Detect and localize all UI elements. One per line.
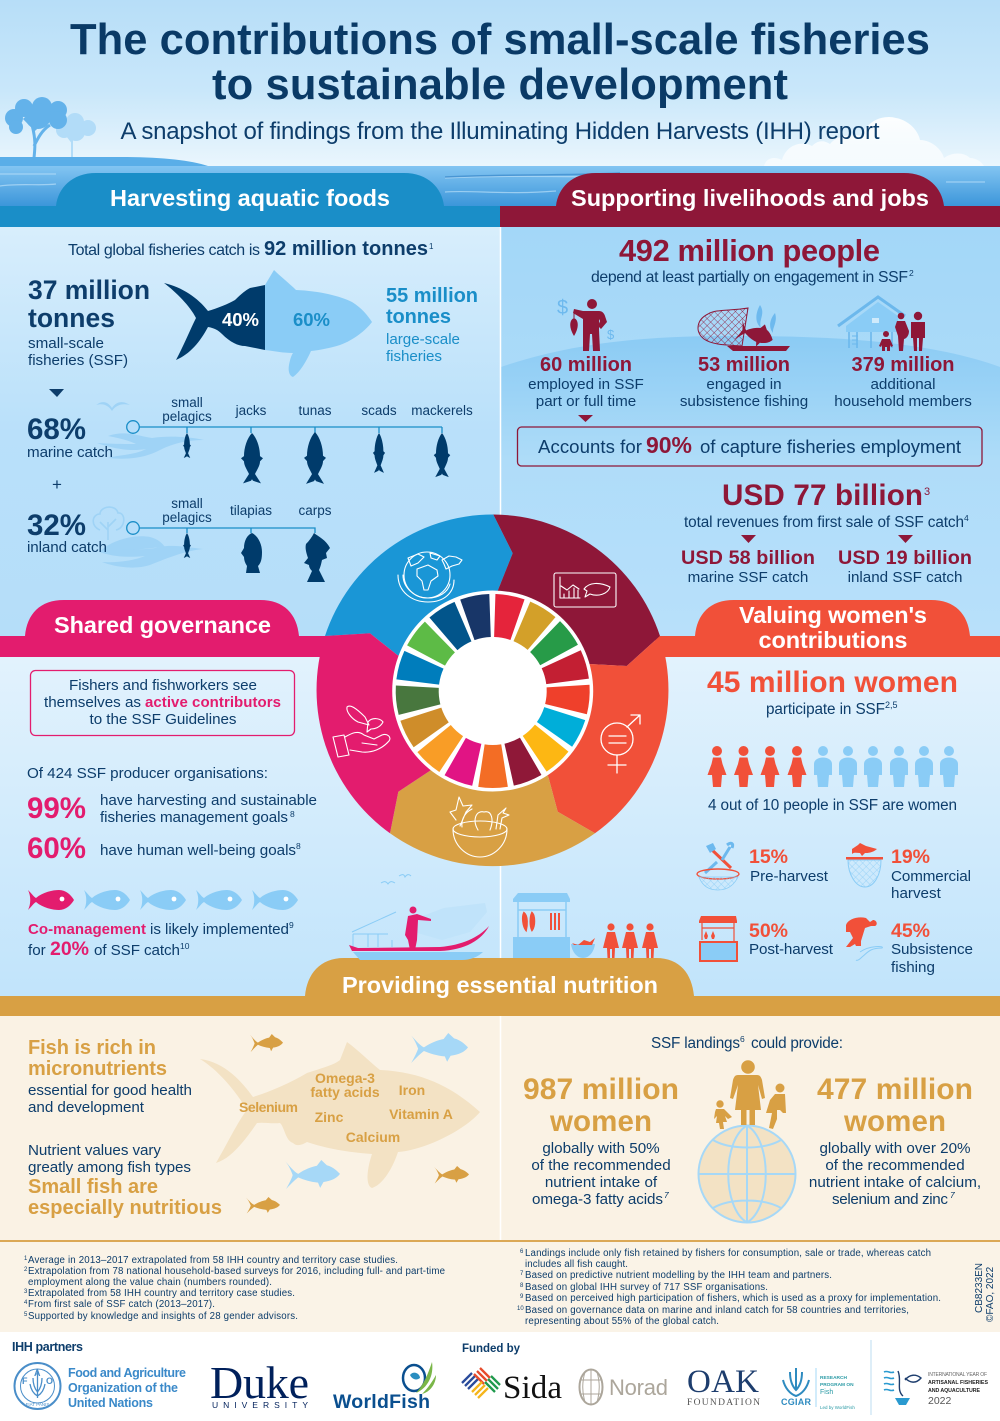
footnotes right: Based on predictive nutrient modelling by the IHH team and partners. — [525, 1270, 832, 1281]
text: fish is rich in micronutrients: essential for good health — [28, 1082, 192, 1099]
callout: 90 percent: of capture fisheries employment — [700, 436, 962, 457]
icon: commercial net with fish — [846, 843, 883, 887]
stat: 60 million employed: part or full time — [536, 393, 636, 410]
icon: small pelagic inland — [183, 533, 191, 558]
panel: nutrition background — [0, 1016, 1000, 1240]
stat: 60 million employed: employed in SSF — [528, 376, 644, 393]
text: 55 million tonnes large-scale: large-scale — [386, 331, 460, 348]
icon: jacks fish — [241, 433, 263, 483]
logo: Sida: Sida — [503, 1370, 562, 1406]
icon: fishing boat — [349, 875, 489, 960]
stat: 19 percent commercial: harvest — [891, 885, 942, 902]
heading: valuing women's contributions — [655, 600, 1000, 657]
footnotes right: Based on governance data on marine and inland catch for 58 countries and territories, — [525, 1305, 909, 1316]
icon: tilapia — [241, 533, 262, 573]
stat: 15 percent pre-harvest: Pre-harvest — [750, 868, 829, 885]
footnotes right: Landings include only fish retained by fishers for consumption, sale or trade, whereas catch — [525, 1248, 931, 1259]
label: scads: scads — [361, 403, 397, 418]
callout: active contributors: active contributors — [145, 694, 281, 711]
stat: 60 percent: 60% — [27, 832, 86, 865]
logo: WorldFish: WorldFish — [333, 1391, 430, 1413]
panel: women background — [501, 657, 1000, 996]
icon: employed person with fish: $ — [607, 327, 615, 342]
logo: Duke University: UNIVERSITY — [212, 1400, 308, 1410]
stat: 987 million women: women — [549, 1105, 652, 1138]
stat: 45 million women: participate in SSF — [766, 701, 885, 718]
stat: 99 percent: fisheries management goals — [100, 809, 288, 826]
stat: 45 percent subsistence: 45% — [891, 920, 930, 942]
stat: 50 percent post-harvest — [749, 920, 834, 958]
stat: 60 million employed: 60 million — [540, 354, 632, 376]
heading: IHH partners: IHH partners — [12, 1340, 83, 1354]
logo: International Year of Artisanal Fisheries and Aquaculture 2022 — [884, 1371, 988, 1407]
stat: 477 million women: globally with over 20% — [819, 1140, 971, 1157]
stat: USD 19 billion: USD 19 billion — [838, 547, 972, 569]
panel: shared governance background — [0, 657, 500, 996]
text: nutrient values vary: Nutrient values vary — [28, 1142, 161, 1159]
icon: small fish swimming — [246, 1033, 469, 1214]
stat: 19 percent commercial: 19% — [891, 846, 930, 868]
stat: 45 percent subsistence: Subsistence — [891, 941, 973, 958]
panel: supporting livelihoods background — [501, 227, 1000, 636]
stat: 379 million household: 379 million — [852, 354, 954, 376]
text: fish is rich in micronutrients: micronutrients — [28, 1058, 167, 1080]
stat: 987 million women: 7 — [664, 1190, 669, 1200]
text: USD 77 billion: 4 — [964, 513, 969, 523]
text: plus: + — [52, 475, 62, 494]
stat: 45 million women: 45 million women — [707, 666, 958, 699]
footnotes right: 7 — [520, 1271, 524, 1277]
label: selenium: Selenium — [239, 1099, 298, 1115]
title: to sustainable development — [212, 61, 788, 109]
subtitle: A snapshot of findings from the Illuminating Hidden Harvests (IHH) report — [120, 118, 880, 145]
text: 37 million tonnes small-scale: fisheries (SSF) — [28, 352, 128, 369]
callout: active contributors: Fishers and fishworkers see — [69, 677, 257, 694]
stat: 987 million women: 987 million — [523, 1073, 679, 1106]
arrow: down from SSF — [49, 389, 64, 397]
chart: fish 40 percent 60 percent: 60% — [293, 309, 330, 330]
heading: funded by: Funded by — [462, 1343, 521, 1355]
footnotes left: 2 — [24, 1267, 28, 1273]
icon: globe with fish — [398, 552, 462, 602]
icon: subsistence fishing figure — [846, 917, 882, 960]
chart: fish 40 percent 60 percent — [164, 270, 372, 377]
footnotes left: Supported by knowledge and insights of 28 gender advisors. — [28, 1311, 298, 1322]
logo: OAK Foundation: FOUNDATION — [687, 1398, 760, 1408]
text: co-management: 20% — [50, 938, 89, 960]
label: carps: carps — [298, 503, 332, 518]
wheel segment: livelihoods maroon — [493, 514, 660, 691]
text: co-management: of SSF catch — [94, 942, 180, 959]
text: USD 77 billion: USD 77 billion — [722, 479, 923, 512]
callout: 90 percent: 90% — [646, 432, 692, 458]
panel: footnotes background — [0, 1240, 1000, 1332]
stat: 60 percent — [27, 832, 301, 865]
callout: 90 percent: Accounts for — [538, 436, 642, 457]
text: publication code — [974, 1263, 996, 1322]
stat: 15 percent pre-harvest: 15% — [749, 846, 788, 868]
logo: CGIAR research program on fish: RESEARCH — [820, 1375, 847, 1381]
callout: active contributors — [30, 670, 294, 736]
stat: 477 million women — [809, 1073, 981, 1208]
text: co-management: Co-management — [28, 921, 146, 938]
logo: Norad: Norad — [609, 1375, 668, 1400]
text: 492 million people: depend at least partially on engagement in SSF — [591, 269, 908, 286]
text: co-management: is likely implemented — [150, 921, 289, 938]
stat: 379 million household — [834, 354, 972, 410]
stat: 45 percent subsistence: fishing — [891, 959, 935, 976]
logo: CGIAR research program on fish: PROGRAM ON — [820, 1382, 854, 1388]
label: calcium: Calcium — [346, 1129, 400, 1145]
stat: 379 million household: additional — [870, 376, 936, 393]
logo: FAO: O — [46, 1376, 53, 1386]
label: small pelagics: pelagics — [162, 409, 212, 424]
label: small pelagics: small — [171, 395, 203, 410]
footnotes right: 6 — [520, 1249, 524, 1255]
logo: Duke University: Duke — [210, 1357, 309, 1408]
logo: International Year of Artisanal Fisheries and Aquaculture 2022: ARTISANAL FISHERIES — [928, 1380, 988, 1386]
label: jacks: jacks — [235, 403, 267, 418]
stat: 53 million subsistence: 53 million — [698, 354, 790, 376]
footnotes right — [517, 1248, 941, 1327]
text: nutrient values vary: Small fish are — [28, 1176, 158, 1198]
icon: employed person with fish: $ — [557, 297, 568, 319]
text: fish is rich in micronutrients: Fish is rich in — [28, 1037, 156, 1059]
stat: 987 million women: omega-3 fatty acids — [532, 1191, 663, 1208]
stat: 53 million subsistence — [680, 354, 808, 410]
footnotes left: From first sale of SSF catch (2013–2017). — [28, 1299, 215, 1310]
text: 55 million tonnes large-scale — [386, 285, 478, 365]
title: The contributions of small-scale fisheries — [70, 16, 930, 64]
stat: 99 percent — [27, 792, 317, 826]
icon: inland tree and waves — [93, 507, 203, 568]
stat: 987 million women: globally with 50% — [542, 1140, 660, 1157]
heading: supporting livelihoods and jobs — [500, 173, 1000, 227]
sea — [0, 157, 1000, 206]
logo: OAK Foundation: OAK — [687, 1364, 759, 1400]
wheel segment: governance pink — [317, 633, 493, 833]
text: total global catch — [68, 238, 434, 260]
text: 37 million tonnes small-scale — [28, 275, 150, 369]
logo: FAO: FIAT PANIS — [26, 1402, 49, 1407]
stat: USD 19 billion: inland SSF catch — [848, 569, 962, 586]
stat: 987 million women: of the recommended — [531, 1157, 671, 1174]
label: zinc: Zinc — [315, 1109, 344, 1125]
label: omega-3 fatty acids: Omega-3 — [315, 1070, 375, 1086]
footnotes right: Based on global IHH survey of 717 SSF organisations. — [525, 1282, 768, 1293]
text: 37 million tonnes small-scale: small-scale — [28, 335, 104, 352]
stat: 477 million women: 477 million — [817, 1073, 973, 1106]
logo: CGIAR research program on fish: CGIAR — [781, 1397, 812, 1407]
stat: 987 million women: nutrient intake of — [545, 1174, 658, 1191]
label: tunas: tunas — [298, 403, 332, 418]
footnotes left: Extrapolation from 78 national household-based surveys for 2016, including full- and part-time — [28, 1266, 445, 1277]
logo: CGIAR research program on fish: Fish — [820, 1389, 833, 1396]
footnotes right: 10 — [517, 1306, 524, 1312]
stat: USD 19 billion — [838, 547, 972, 586]
text: co-management — [28, 920, 294, 960]
panel: logos background — [0, 1332, 1000, 1421]
logo: International Year of Artisanal Fisheries and Aquaculture 2022: 2022 — [928, 1395, 952, 1407]
stat: 53 million subsistence: subsistence fishing — [680, 393, 808, 410]
icon: bowl of fish — [450, 797, 509, 857]
icon: market stall — [513, 893, 595, 958]
text: total global catch: Total global fisheries catch is — [68, 242, 260, 259]
text: 68 percent marine catch: marine catch — [27, 444, 113, 461]
stat: 477 million women: nutrient intake of calcium, — [809, 1174, 981, 1191]
sky background — [0, 0, 1000, 166]
logo: WorldFish — [333, 1362, 436, 1413]
footnotes left: 4 — [24, 1300, 28, 1306]
icon: house on stilts with family — [838, 297, 925, 351]
heading: valuing women's contributions: Valuing women's — [739, 602, 927, 628]
footnotes left — [24, 1255, 445, 1322]
text: fish is rich in micronutrients — [28, 1037, 192, 1116]
stat: 50 percent post-harvest: 50% — [749, 920, 788, 942]
stat: 477 million women: selenium and zinc — [832, 1191, 948, 1208]
footnotes right: representing about 55% of the global catch. — [525, 1316, 719, 1327]
logo: CGIAR research program on fish — [781, 1368, 855, 1410]
label: omega-3 fatty acids — [310, 1070, 380, 1100]
label: iron: Iron — [399, 1082, 425, 1098]
icon: mackerel fish — [434, 433, 450, 477]
text: total global catch: 92 million tonnes — [264, 238, 428, 260]
text: nutrient values vary: especially nutritious — [28, 1197, 222, 1219]
arrow: to 90 percent box — [578, 415, 593, 422]
icon: clouds — [764, 117, 984, 166]
text: SSF landings could provide: SSF landings — [651, 1035, 740, 1052]
label: small pelagics — [162, 395, 212, 424]
icon: gender equality — [601, 715, 640, 773]
heading: valuing women's contributions: contributions — [758, 627, 908, 653]
icon: scad fish — [373, 433, 385, 473]
stat: USD 58 billion: marine SSF catch — [688, 569, 808, 586]
heading: harvesting aquatic foods: Harvesting aquatic foods — [110, 185, 390, 211]
arrows: to marine and inland — [741, 535, 913, 543]
icon row: five fish — [28, 890, 298, 910]
heading: shared governance: Shared governance — [54, 612, 271, 638]
text: USD 77 billion — [684, 479, 969, 531]
text: SSF landings could provide: 6 — [740, 1034, 745, 1044]
stat: 987 million women — [523, 1073, 679, 1208]
footnotes left: 5 — [24, 1312, 28, 1318]
chart: marine species line — [127, 395, 473, 484]
stat: 477 million women: 7 — [950, 1190, 955, 1200]
label: small pelagics inland: small — [171, 496, 203, 511]
label: vitamin A: Vitamin A — [389, 1106, 453, 1122]
wheel segment: women orange — [493, 636, 668, 833]
footnotes left: employment along the value chain (numbers rounded). — [28, 1277, 272, 1288]
text: 492 million people — [591, 233, 914, 286]
stat: 45 million women — [707, 666, 958, 718]
logo: FAO: Organization of the — [68, 1381, 178, 1395]
text: SSF landings could provide — [651, 1034, 843, 1052]
text: 37 million tonnes small-scale: tonnes — [28, 303, 115, 333]
stat: USD 58 billion — [681, 547, 815, 586]
text: total global catch: 1 — [429, 242, 434, 251]
footnotes right: 9 — [520, 1294, 524, 1300]
label: small pelagics inland: pelagics — [162, 510, 212, 525]
heading: providing essential nutrition: Providing essential nutrition — [342, 972, 658, 998]
stat: 60 million employed — [528, 354, 644, 410]
stat: 53 million subsistence: engaged in — [706, 376, 782, 393]
text: co-management: for — [28, 942, 46, 959]
text: co-management: 9 — [289, 920, 294, 930]
icon: pre-harvest tools and basket — [697, 843, 739, 890]
logo: Sida — [462, 1368, 562, 1406]
heading: harvesting aquatic foods — [0, 173, 500, 227]
title — [70, 16, 930, 109]
text: 492 million people: 2 — [909, 268, 914, 278]
SDG wheel — [386, 584, 599, 798]
text: 4 out of 10: 4 out of 10 people in SSF are women — [708, 797, 957, 814]
text: nutrient values vary: greatly among fish types — [28, 1159, 191, 1176]
chart: inland species line — [127, 496, 332, 582]
label: mackerels: mackerels — [411, 403, 473, 418]
panel: harvesting aquatic foods background — [0, 227, 500, 636]
logo: CGIAR research program on fish: Led by WorldFish — [820, 1405, 855, 1410]
chart: centre wheel — [317, 514, 668, 866]
text: 55 million tonnes large-scale: fisheries — [386, 348, 442, 365]
text: SSF landings could provide: could provide: — [751, 1035, 843, 1052]
logo: International Year of Artisanal Fisheries and Aquaculture 2022: AND AQUACULTURE — [928, 1388, 980, 1394]
label: small pelagics inland — [162, 496, 212, 525]
logo: International Year of Artisanal Fisheries and Aquaculture 2022: INTERNATIONAL YEAR OF — [928, 1372, 987, 1378]
text: fish is rich in micronutrients: and development — [28, 1099, 145, 1116]
callout: 90 percent — [518, 427, 982, 466]
logo: FAO: A — [34, 1368, 41, 1378]
text: co-management: 10 — [180, 941, 190, 951]
icon: trees — [5, 97, 96, 158]
footnotes right: includes all fish caught. — [525, 1259, 628, 1270]
stat: 50 percent post-harvest: Post-harvest — [749, 941, 834, 958]
chart: nutrient fish — [200, 1042, 480, 1188]
stat: 99 percent: 99% — [27, 792, 86, 825]
text: 32 percent inland catch: 32% — [27, 509, 86, 542]
chart: fish 40 percent 60 percent: 40% — [222, 309, 259, 330]
text: 68 percent marine catch: 68% — [27, 413, 86, 446]
icon: post-harvest stall — [699, 916, 737, 961]
centre divider — [500, 227, 502, 1240]
stat: 45 percent subsistence — [891, 920, 973, 976]
icon: tuna fish — [304, 432, 326, 484]
label: omega-3 fatty acids: fatty acids — [310, 1084, 380, 1100]
stat: 477 million women: of the recommended — [825, 1157, 965, 1174]
icon: hand with fish — [333, 706, 390, 757]
stat: 19 percent commercial — [891, 846, 971, 902]
stat: USD 58 billion: USD 58 billion — [681, 547, 815, 569]
logo: FAO: F — [22, 1376, 28, 1386]
text: of 424 SSF producer organisations: Of 424 SSF producer organisations: — [27, 765, 268, 782]
icon: three women at market — [603, 923, 658, 958]
logo: FAO: United Nations — [68, 1396, 153, 1410]
text: nutrient values vary — [28, 1142, 222, 1219]
footnotes left: Average in 2013–2017 extrapolated from 58 IHH country and territory case studies. — [28, 1255, 398, 1266]
wheel segment: harvesting blue — [325, 514, 513, 691]
text: 37 million tonnes small-scale: 37 million — [28, 275, 150, 305]
footnotes left: 3 — [24, 1289, 28, 1295]
stat: 477 million women: women — [843, 1105, 946, 1138]
label: tilapias: tilapias — [230, 503, 272, 518]
stat: 60 percent: 8 — [296, 841, 301, 851]
chart: 4 of 10 people pictogram — [708, 746, 958, 787]
stat: 45 million women: 2,5 — [885, 700, 898, 710]
stat: 99 percent: have harvesting and sustainable — [100, 792, 317, 809]
icon: carp — [304, 533, 330, 582]
heading: shared governance — [0, 600, 335, 657]
divider: logos — [870, 1340, 872, 1415]
icon: net with fish on plate — [698, 305, 790, 352]
text: USD 77 billion: total revenues from first sale of SSF catch — [684, 514, 964, 531]
callout: active contributors: to the SSF Guidelines — [90, 711, 237, 728]
panel: hill behind livelihoods — [501, 336, 1000, 460]
logo: FAO: Food and Agriculture — [68, 1366, 186, 1380]
text: 55 million tonnes large-scale: tonnes — [386, 306, 451, 328]
logo: Norad — [580, 1370, 668, 1404]
footnotes left: Extrapolated from 58 IHH country and territory case studies. — [28, 1288, 295, 1299]
stat: 19 percent commercial: Commercial — [891, 868, 971, 885]
heading: providing essential nutrition — [0, 958, 1000, 1016]
text: 32 percent inland catch: inland catch — [27, 539, 107, 556]
heading: supporting livelihoods and jobs: Supporting livelihoods and jobs — [571, 185, 929, 211]
text: 492 million people: 492 million people — [619, 233, 880, 268]
stat: 99 percent: 8 — [290, 809, 295, 819]
text: 55 million tonnes large-scale: 55 million — [386, 285, 478, 307]
stat: 60 percent: have human well-being goals — [100, 842, 296, 859]
icon: mother and children on globe — [698, 1060, 796, 1222]
icon: employed person with fish — [557, 297, 615, 351]
icon: small pelagic fish — [183, 433, 191, 458]
stat: 379 million household: household members — [834, 393, 972, 410]
logo: FAO — [14, 1363, 186, 1410]
text: publication code: CB8233EN — [974, 1263, 985, 1313]
text: publication code: ©FAO, 2022 — [985, 1266, 996, 1322]
icon: marine waves and bird — [96, 402, 204, 459]
text: 68 percent marine catch — [27, 413, 113, 461]
footnotes right: Based on perceived high participation of fishers, which is used as a proxy for implementation. — [525, 1293, 941, 1304]
text: USD 77 billion: 3 — [924, 486, 930, 498]
stat: 15 percent pre-harvest — [749, 846, 829, 885]
icon: data card with fish — [554, 573, 616, 607]
footnotes right: 8 — [520, 1283, 524, 1289]
text: 32 percent inland catch — [27, 509, 107, 556]
wheel segment: nutrition gold — [390, 691, 595, 866]
footnotes left: 1 — [24, 1256, 28, 1262]
callout: active contributors: themselves as — [44, 694, 141, 711]
